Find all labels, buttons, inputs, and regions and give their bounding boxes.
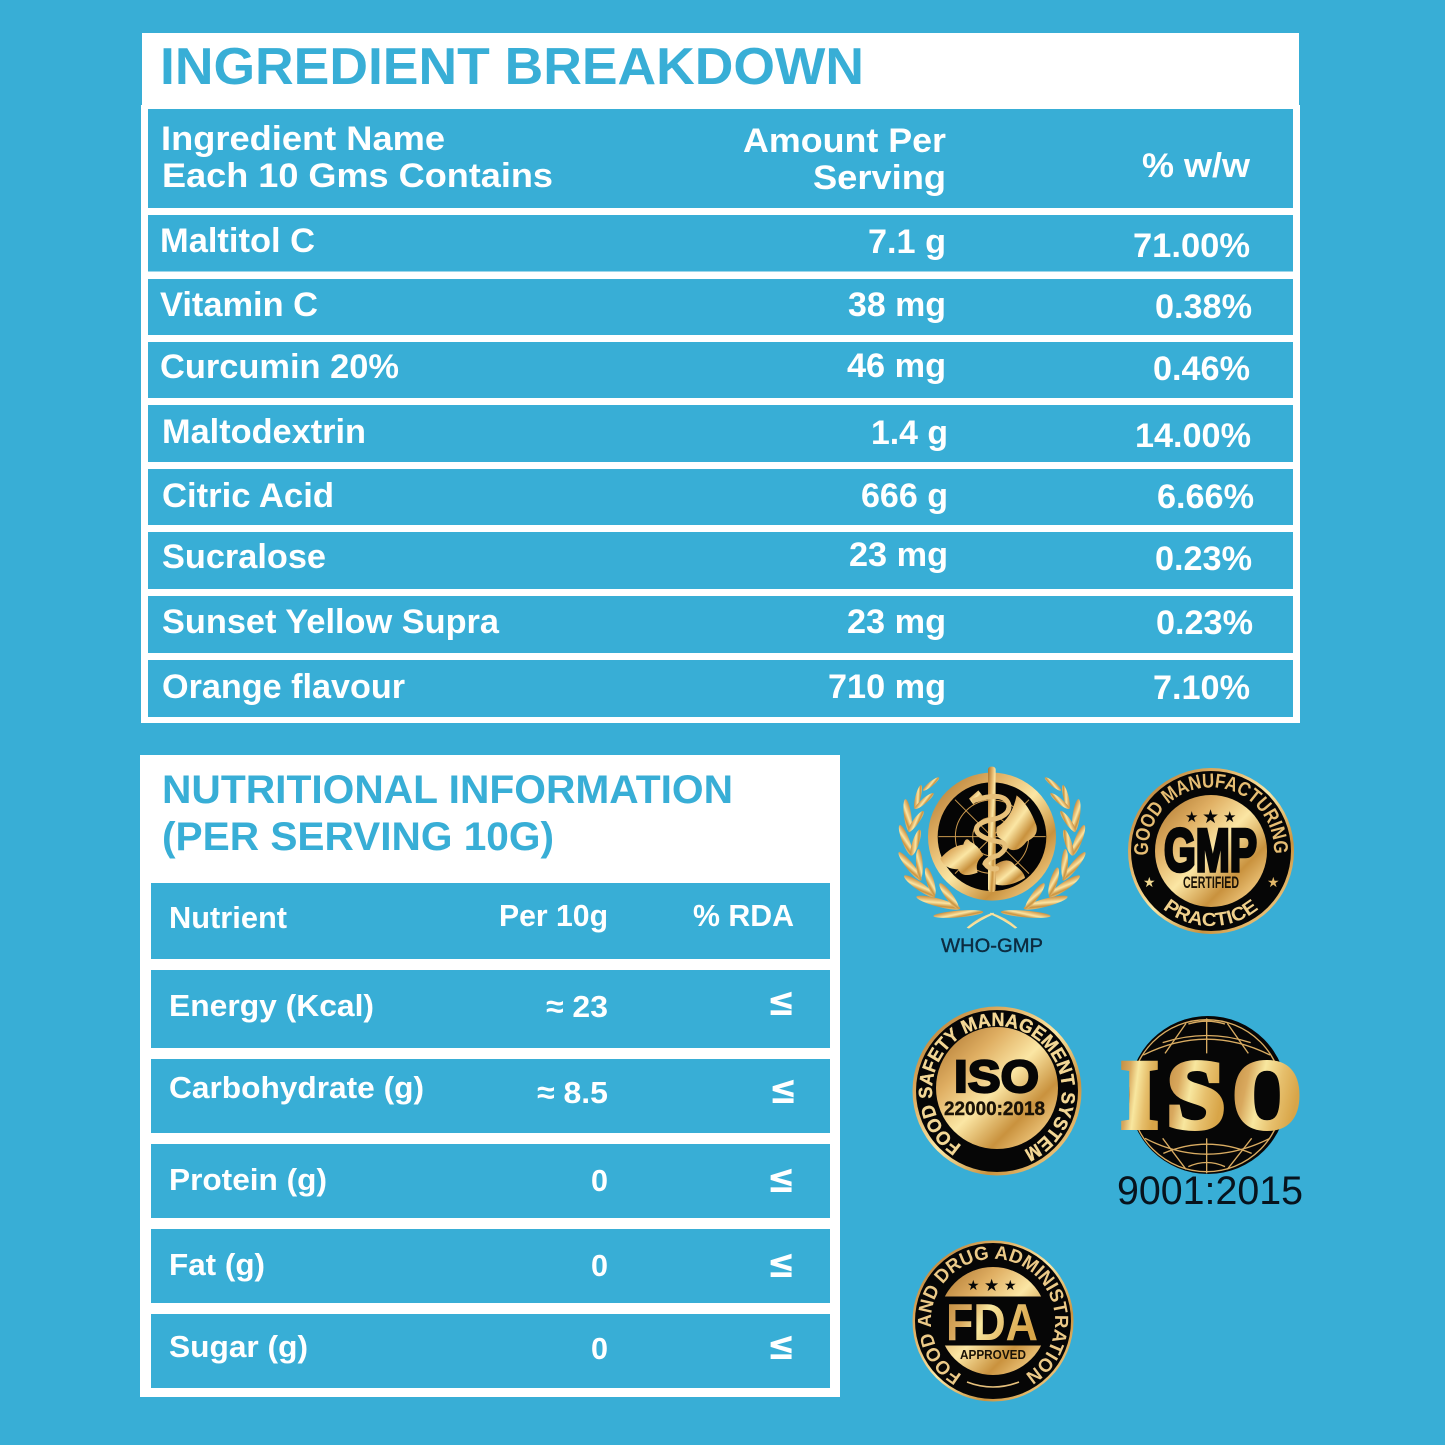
badge: FDA approved: FDA (946, 1294, 1038, 1352)
label: 9001:2015: 9001:2015 (1117, 1169, 1303, 1213)
row: Orange flavour: Orange flavour (162, 668, 405, 706)
panel: nutritional information (140, 755, 840, 1397)
nutrition header row: Per 10g (499, 898, 608, 933)
label: WHO-GMP: WHO-GMP (941, 935, 1043, 957)
row: Sunset Yellow Supra (148, 596, 1293, 653)
badge: ISO 9001:2015: O (1233, 1041, 1301, 1148)
badge: FDA approved: ★ (967, 1277, 980, 1293)
table header row: Amount Per (743, 122, 946, 160)
row: Vitamin C: 0.38% (1155, 288, 1252, 326)
title: nutritional information (162, 768, 733, 859)
badge: ISO 22000:2018: FOOD SAFETY MANAGEMENT SYSTEM (918, 1012, 1076, 1162)
row: Vitamin C (148, 279, 1293, 335)
row: Protein: Protein (g) (169, 1162, 327, 1197)
row: Orange flavour: 7.10% (1153, 669, 1250, 707)
row: Fat (151, 1229, 830, 1303)
row: Sucralose: 23 mg (849, 536, 948, 574)
badge: GMP certified: ★ (1143, 874, 1156, 890)
row: Maltodextrin: Maltodextrin (162, 413, 366, 451)
row: Sucralose (148, 532, 1293, 589)
table header row (148, 109, 1293, 208)
badge: GMP certified: ★ (1267, 874, 1280, 890)
badge: FDA approved: ★ (1004, 1277, 1017, 1293)
row: Sugar (151, 1314, 830, 1388)
badge: FDA approved: FOOD AND DRUG ADMINISTRATION (918, 1246, 1068, 1385)
row: Maltitol C (148, 215, 1293, 272)
row: Maltitol C: 71.00% (1133, 227, 1250, 265)
row: Maltodextrin: 14.00% (1135, 417, 1251, 455)
row: Sucralose: Sucralose (162, 538, 326, 576)
row: Energy: Energy (Kcal) (169, 988, 374, 1023)
nutrition header row (151, 883, 830, 959)
table header row: % w/w (1142, 147, 1251, 185)
badge: GMP certified: ★ (1223, 809, 1236, 826)
badge: GMP certified: CERTIFIED (1183, 873, 1239, 892)
badge: GMP certified: PRACTICE (1164, 898, 1258, 926)
row: Protein (151, 1144, 830, 1218)
badge: WHO-GMP (896, 767, 1088, 957)
row: Energy (151, 970, 830, 1048)
row: Curcumin 20%: 0.46% (1153, 350, 1250, 388)
badge: GMP certified: ★ (1202, 807, 1219, 828)
row: Maltodextrin (148, 405, 1293, 462)
row: Protein: 0 (591, 1163, 608, 1198)
row: Sugar: ≤ (767, 1323, 795, 1369)
row: Orange flavour (148, 660, 1293, 717)
row: Carbohydrate: ≈ 8.5 (537, 1075, 608, 1110)
nutrition header row: Nutrient (169, 900, 287, 935)
badge: ISO 22000:2018: 22000:2018 (944, 1099, 1045, 1120)
row: Curcumin 20%: 46 mg (847, 347, 946, 385)
row: Protein: ≤ (767, 1156, 795, 1202)
row: Energy: ≤ (767, 979, 795, 1025)
row: Energy: ≈ 23 (546, 989, 608, 1024)
row: Sugar: Sugar (g) (169, 1329, 308, 1364)
title: nutritional information: NUTRITIONAL INFORMATION (162, 768, 733, 812)
row: Carbohydrate: Carbohydrate (g) (169, 1070, 424, 1105)
row: Maltitol C: 7.1 g (868, 223, 946, 261)
row: Vitamin C: 38 mg (848, 286, 946, 324)
row: Citric Acid (148, 469, 1293, 525)
row: Maltodextrin: 1.4 g (871, 414, 948, 452)
badge: ISO 9001:2015: S (1167, 1041, 1225, 1148)
badge: FDA approved: APPROVED (960, 1347, 1026, 1362)
panel: ingredient breakdown (141, 33, 1300, 723)
row: Sucralose: 0.23% (1155, 540, 1252, 578)
table header row: Serving (813, 159, 946, 197)
nutrition header row: % RDA (693, 898, 794, 933)
row: Carbohydrate: ≤ (769, 1067, 797, 1113)
row: Citric Acid: Citric Acid (162, 477, 334, 515)
table header row: Ingredient Name (161, 120, 445, 158)
badge: GMP certified (1128, 768, 1294, 934)
badge: GMP certified: ★ (1185, 809, 1198, 826)
title: ingredient breakdown: INGREDIENT BREAKDOWN (160, 38, 864, 96)
table header row: Each 10 Gms Contains (162, 157, 553, 195)
badge: GMP certified: GOOD MANUFACTURING (1134, 774, 1288, 855)
row: Orange flavour: 710 mg (828, 668, 946, 706)
badge: ISO 9001:2015 (1117, 1016, 1303, 1213)
row: Maltitol C: Maltitol C (160, 222, 315, 260)
badge: GMP certified: GMP (1164, 817, 1257, 884)
row: Citric Acid: 666 g (861, 477, 948, 515)
row: Sunset Yellow Supra: Sunset Yellow Supra (162, 603, 500, 641)
title: nutritional information: (PER SERVING 10G) (162, 815, 554, 859)
badge: ISO 9001:2015: I (1121, 1041, 1158, 1148)
row: Carbohydrate (151, 1059, 830, 1133)
badge: ISO 22000:2018: ISO (954, 1051, 1039, 1102)
row: Curcumin 20% (148, 342, 1293, 398)
badge: FDA approved: ★ (984, 1276, 999, 1295)
row: Curcumin 20%: Curcumin 20% (160, 348, 399, 386)
row: Sunset Yellow Supra: 0.23% (1156, 604, 1253, 642)
row: Sugar: 0 (591, 1331, 608, 1366)
row: Vitamin C: Vitamin C (160, 286, 318, 324)
row: Sunset Yellow Supra: 23 mg (847, 603, 946, 641)
row: Fat: 0 (591, 1248, 608, 1283)
row: Fat: ≤ (767, 1241, 795, 1287)
row: Fat: Fat (g) (169, 1247, 265, 1282)
row: Citric Acid: 6.66% (1157, 478, 1254, 516)
